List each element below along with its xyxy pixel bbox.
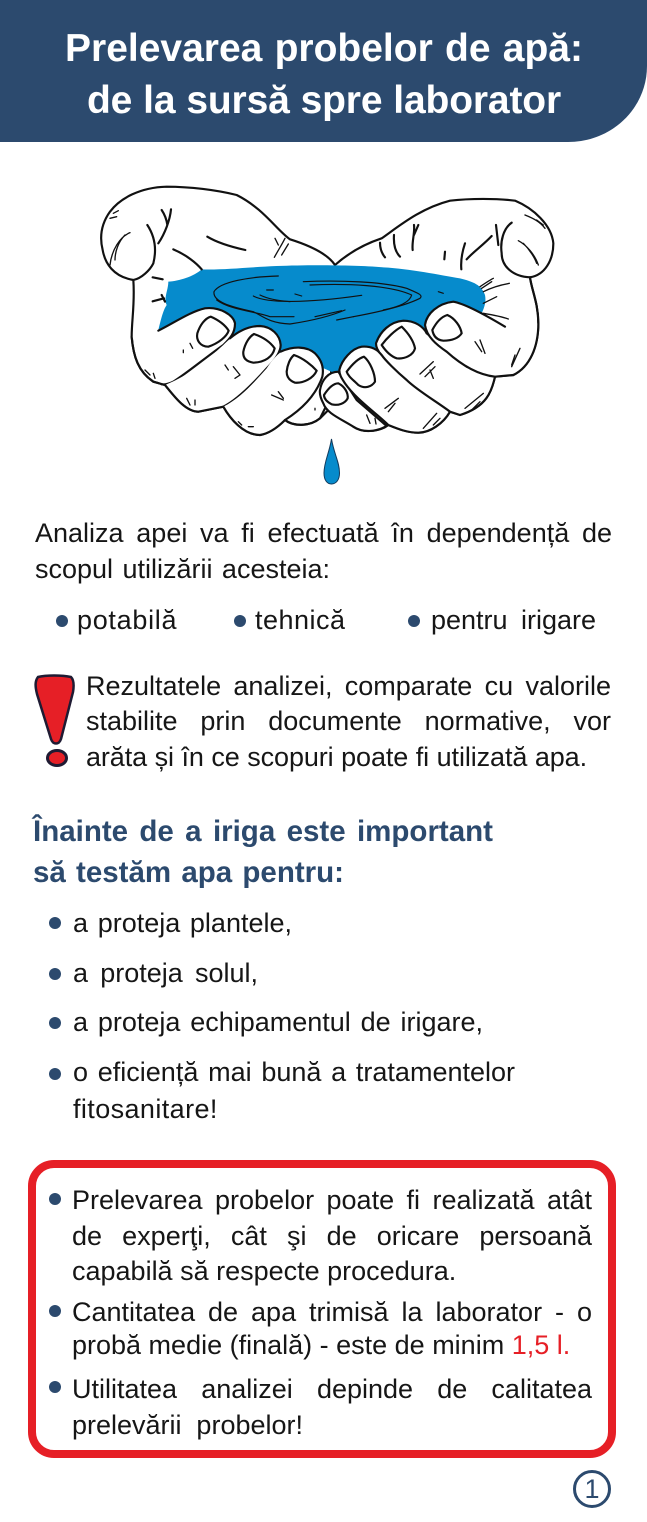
- bullet 3: [49, 1381, 61, 1393]
- bullet 2: [49, 968, 61, 980]
- reasons list: [49, 908, 515, 1124]
- little finger: [320, 372, 387, 431]
- right middle finger: [376, 321, 495, 415]
- water use list: [56, 605, 596, 635]
- left middle nail: [243, 334, 275, 363]
- title line 1: Prelevarea probelor de apă:: [65, 27, 583, 70]
- bullet 1: [49, 917, 61, 929]
- left hand: [101, 187, 335, 435]
- icon: water drop: [324, 438, 340, 484]
- page number: [573, 1470, 611, 1508]
- callout: key facts: [28, 1160, 616, 1458]
- left thumb: [133, 209, 245, 302]
- bullet: tehnică: [234, 615, 246, 627]
- intro line 1: Analiza apei va fi efectuată în dependență de: [35, 518, 612, 548]
- fact 3 line 1: Utilitatea analizei depinde de calitatea: [72, 1374, 592, 1404]
- left middle finger: [165, 326, 281, 412]
- intro line 2: scopul utilizării acesteia:: [35, 554, 330, 584]
- right thumb and creases: [380, 223, 530, 277]
- skin detail marks: [145, 313, 520, 428]
- label: potabilă: potabilă: [77, 605, 177, 635]
- warning line 2: stabilite prin documente normative, vor: [86, 706, 611, 736]
- bullet 3: [49, 1017, 61, 1029]
- title line 2: de la sursă spre laborator: [87, 79, 561, 122]
- left ring finger: [223, 347, 323, 435]
- fact 2 line 1: Cantitatea de apa trimisă la laborator - o: [72, 1297, 592, 1327]
- reason 2: a proteja solul,: [73, 958, 258, 988]
- reason 4 line 2: fitosanitare!: [73, 1094, 218, 1124]
- warning line 3: arăta și în ce scopuri poate fi utilizată apa.: [86, 742, 587, 772]
- reason 4 line 1: o eficiență mai bună a tratamentelor: [73, 1057, 515, 1087]
- right hand: [330, 199, 553, 433]
- left index finger: [132, 308, 235, 384]
- fact 1 line 1: Prelevarea probelor poate fi realizată atât: [72, 1185, 592, 1215]
- heading line 2: să testăm apa pentru:: [33, 856, 344, 889]
- left ring nail: [287, 355, 317, 383]
- label: pentru irigare: pentru irigare: [431, 605, 596, 635]
- bullet: pentru irigare: [408, 615, 420, 627]
- section heading: [32, 814, 493, 889]
- water surface: [158, 265, 485, 373]
- right index nail: [432, 315, 462, 341]
- right index finger: [425, 302, 538, 377]
- bullet 1: [49, 1193, 61, 1205]
- illustration: hands holding water: [100, 186, 554, 436]
- fact 2 line 2: probă medie (finală) - este de minim 1,5 l.: [72, 1330, 570, 1360]
- heading line 1: Înainte de a iriga este important: [33, 815, 493, 848]
- water ripples: [214, 276, 443, 324]
- right ring nail: [347, 357, 375, 387]
- little finger nail: [324, 383, 348, 405]
- bullet: potabilă: [56, 615, 68, 627]
- header banner: [0, 0, 647, 142]
- page number: 1: [584, 1474, 600, 1504]
- right middle nail: [382, 327, 415, 358]
- icon: exclamation mark: [34, 674, 75, 767]
- bullet 4: [49, 1068, 61, 1080]
- left index nail: [197, 317, 229, 347]
- reason 3: a proteja echipamentul de irigare,: [73, 1007, 483, 1037]
- warning line 1: Rezultatele analizei, comparate cu valorile: [86, 671, 611, 701]
- label: tehnică: tehnică: [255, 605, 346, 635]
- fact 1 line 2: de experţi, cât şi de oricare persoană: [72, 1221, 592, 1251]
- intro text: [35, 518, 612, 584]
- fact 3 line 2: prelevării probelor!: [72, 1410, 303, 1440]
- reason 1: a proteja plantele,: [73, 908, 292, 938]
- left hand lower outline: [132, 337, 325, 435]
- warning note: [34, 671, 611, 772]
- fact 1 line 3: capabilă să respecte procedura.: [72, 1256, 456, 1286]
- callout frame: [28, 1160, 616, 1458]
- banner background: [0, 0, 647, 142]
- right ring finger: [339, 347, 450, 433]
- bullet 2: [49, 1305, 61, 1317]
